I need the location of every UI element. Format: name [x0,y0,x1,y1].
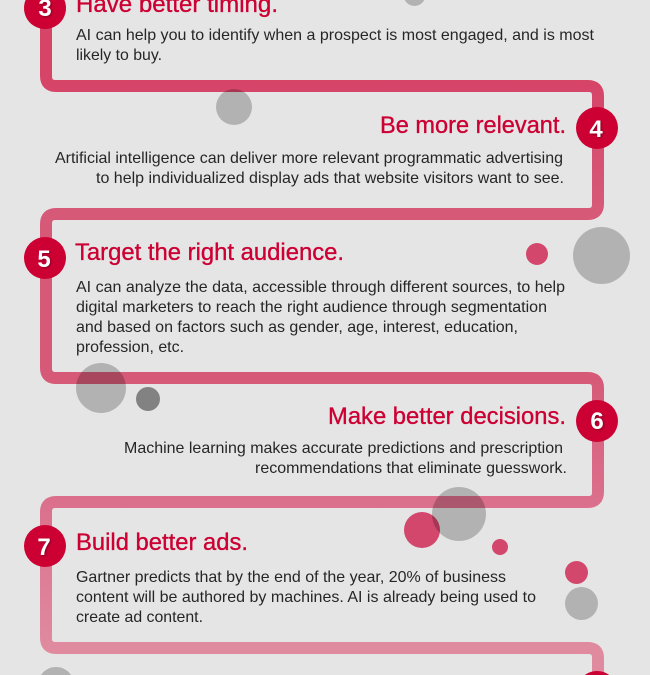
step 5 badge: 5 [37,246,51,273]
step 7 body [76,569,536,626]
step 7 badge [24,525,66,567]
step 3 body: AI can help you to identify when a prospect is most engaged, and is most [76,27,595,44]
step 6 badge: 6 [590,408,604,435]
step 4 heading: Be more relevant. [380,112,566,139]
step 4 body: to help individualized display ads that website visitors want to see. [96,170,564,187]
step 5 heading: Target the right audience. [75,239,344,266]
step 7 body: create ad content. [76,609,203,626]
step 7 body: content will be authored by machines. AI is already being used to [76,589,536,606]
step 3 badge [24,0,66,29]
step 7: build better ads [24,525,536,626]
step 5 body: and based on factors such as gender, age, interest, education, [76,319,518,336]
step 3 body: likely to buy. [76,47,162,64]
step 6 badge [576,400,618,442]
step 5 body [76,279,565,356]
step 3 body [76,27,595,64]
step 5 body: digital marketers to reach the right audience through segmentation [76,299,547,316]
step 5: target the right audience [24,237,565,356]
step 4 badge [576,107,618,149]
step 4 body: Artificial intelligence can deliver more relevant programmatic advertising [55,150,563,167]
step 6 body: Machine learning makes accurate predictions and prescription [124,440,563,457]
step 6 body [124,440,567,477]
step 5 body: profession, etc. [76,339,184,356]
step 4 badge: 4 [589,116,603,143]
step 8 badge, cropped at the bottom edge [585,671,609,675]
step 4 body [55,150,564,187]
step 6 body: recommendations that eliminate guesswork. [255,460,567,477]
step 6: make better decisions [124,400,618,477]
step 7 body: Gartner predicts that by the end of the year, 20% of business [76,569,506,586]
step 5 body: AI can analyze the data, accessible through different sources, to help [76,279,565,296]
step 7 heading: Build better ads. [76,529,248,556]
step 4: be more relevant [55,107,618,187]
step 6 heading: Make better decisions. [328,403,566,430]
step 5 badge [24,237,66,279]
step 3: have better timing [24,0,595,64]
step 7 badge: 7 [37,534,51,561]
